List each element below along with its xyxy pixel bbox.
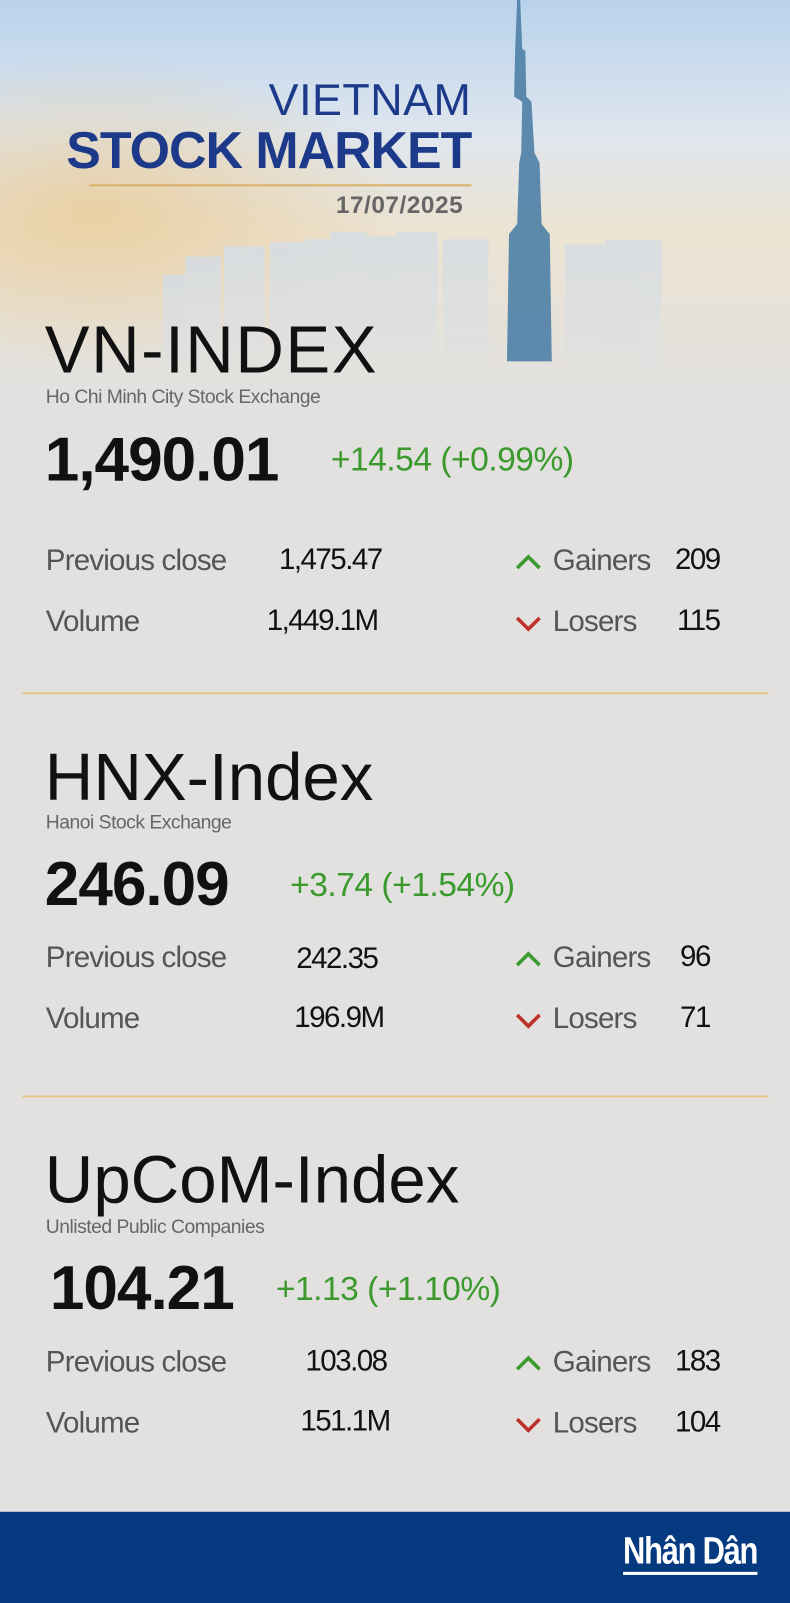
panel: UpCoM-Index: Losers bbox=[553, 1407, 637, 1440]
icon: up arrow bbox=[516, 951, 541, 966]
panel: UpCoM-Index: Previous close bbox=[46, 1346, 226, 1378]
panel: HNX-Index: HNX-Index bbox=[45, 739, 373, 814]
panel: HNX-Index bbox=[45, 739, 710, 1035]
footer bbox=[0, 1512, 790, 1603]
panel: HNX-Index: 71 bbox=[680, 1002, 710, 1034]
panel: UpCoM-Index: Unlisted Public Companies bbox=[46, 1217, 264, 1238]
panel: UpCoM-Index: Volume bbox=[46, 1407, 139, 1440]
panel: HNX-Index: Gainers bbox=[553, 942, 650, 974]
panel: VN-INDEX: Volume bbox=[46, 606, 139, 638]
icon: down arrow bbox=[516, 1418, 541, 1433]
panel: VN-INDEX: 209 bbox=[675, 544, 720, 576]
panel: VN-INDEX: VN-INDEX bbox=[45, 312, 378, 387]
panel: VN-INDEX: 1,475.47 bbox=[279, 544, 382, 576]
panel: UpCoM-Index bbox=[45, 1141, 720, 1440]
panel: VN-INDEX: +14.54 (+0.99%) bbox=[331, 440, 574, 477]
header background bbox=[0, 0, 790, 362]
panel: VN-INDEX: Gainers bbox=[553, 545, 650, 577]
panel: HNX-Index: 196.9M bbox=[294, 1002, 384, 1034]
panel: VN-INDEX: 1,449.1M bbox=[267, 605, 378, 637]
panel: HNX-Index: Losers bbox=[553, 1003, 637, 1035]
panel: UpCoM-Index: UpCoM-Index bbox=[45, 1141, 459, 1217]
logo: Nhan Dan: Nhân Dân bbox=[623, 1530, 757, 1572]
panel: UpCoM-Index: 103.08 bbox=[305, 1345, 387, 1377]
panel: UpCoM-Index: 183 bbox=[675, 1345, 720, 1377]
panel: HNX-Index: +3.74 (+1.54%) bbox=[290, 865, 515, 903]
panel: HNX-Index: Previous close bbox=[46, 942, 226, 974]
panel: VN-INDEX: 115 bbox=[677, 605, 719, 637]
icon: landmark tower bbox=[507, 0, 552, 361]
panel: HNX-Index: 96 bbox=[680, 941, 710, 973]
panel: HNX-Index: Volume bbox=[46, 1003, 139, 1035]
icon: down arrow bbox=[516, 1014, 541, 1029]
icon: up arrow bbox=[516, 1356, 541, 1370]
panel: UpCoM-Index: 104 bbox=[675, 1406, 720, 1438]
title bbox=[66, 75, 472, 219]
icon: down arrow bbox=[516, 616, 541, 632]
panel: HNX-Index: Hanoi Stock Exchange bbox=[46, 812, 231, 834]
title: 17/07/2025 bbox=[336, 191, 463, 219]
panel: VN-INDEX: Ho Chi Minh City Stock Exchange bbox=[46, 387, 320, 408]
title: VIETNAM bbox=[269, 75, 471, 125]
icon: up arrow bbox=[516, 554, 541, 570]
title: STOCK MARKET bbox=[66, 121, 471, 179]
panel: VN-INDEX: Losers bbox=[553, 606, 637, 638]
panel: VN-INDEX bbox=[45, 312, 720, 638]
panel: UpCoM-Index: Gainers bbox=[553, 1346, 650, 1378]
panel: UpCoM-Index: 151.1M bbox=[300, 1405, 390, 1437]
panel: VN-INDEX: Previous close bbox=[46, 545, 226, 577]
panel: UpCoM-Index: 104.21 bbox=[50, 1253, 234, 1322]
panel: UpCoM-Index: +1.13 (+1.10%) bbox=[276, 1269, 500, 1307]
panel: HNX-Index: 242.35 bbox=[296, 943, 377, 975]
panel: HNX-Index: 246.09 bbox=[45, 849, 229, 918]
panel: VN-INDEX: 1,490.01 bbox=[45, 425, 278, 494]
